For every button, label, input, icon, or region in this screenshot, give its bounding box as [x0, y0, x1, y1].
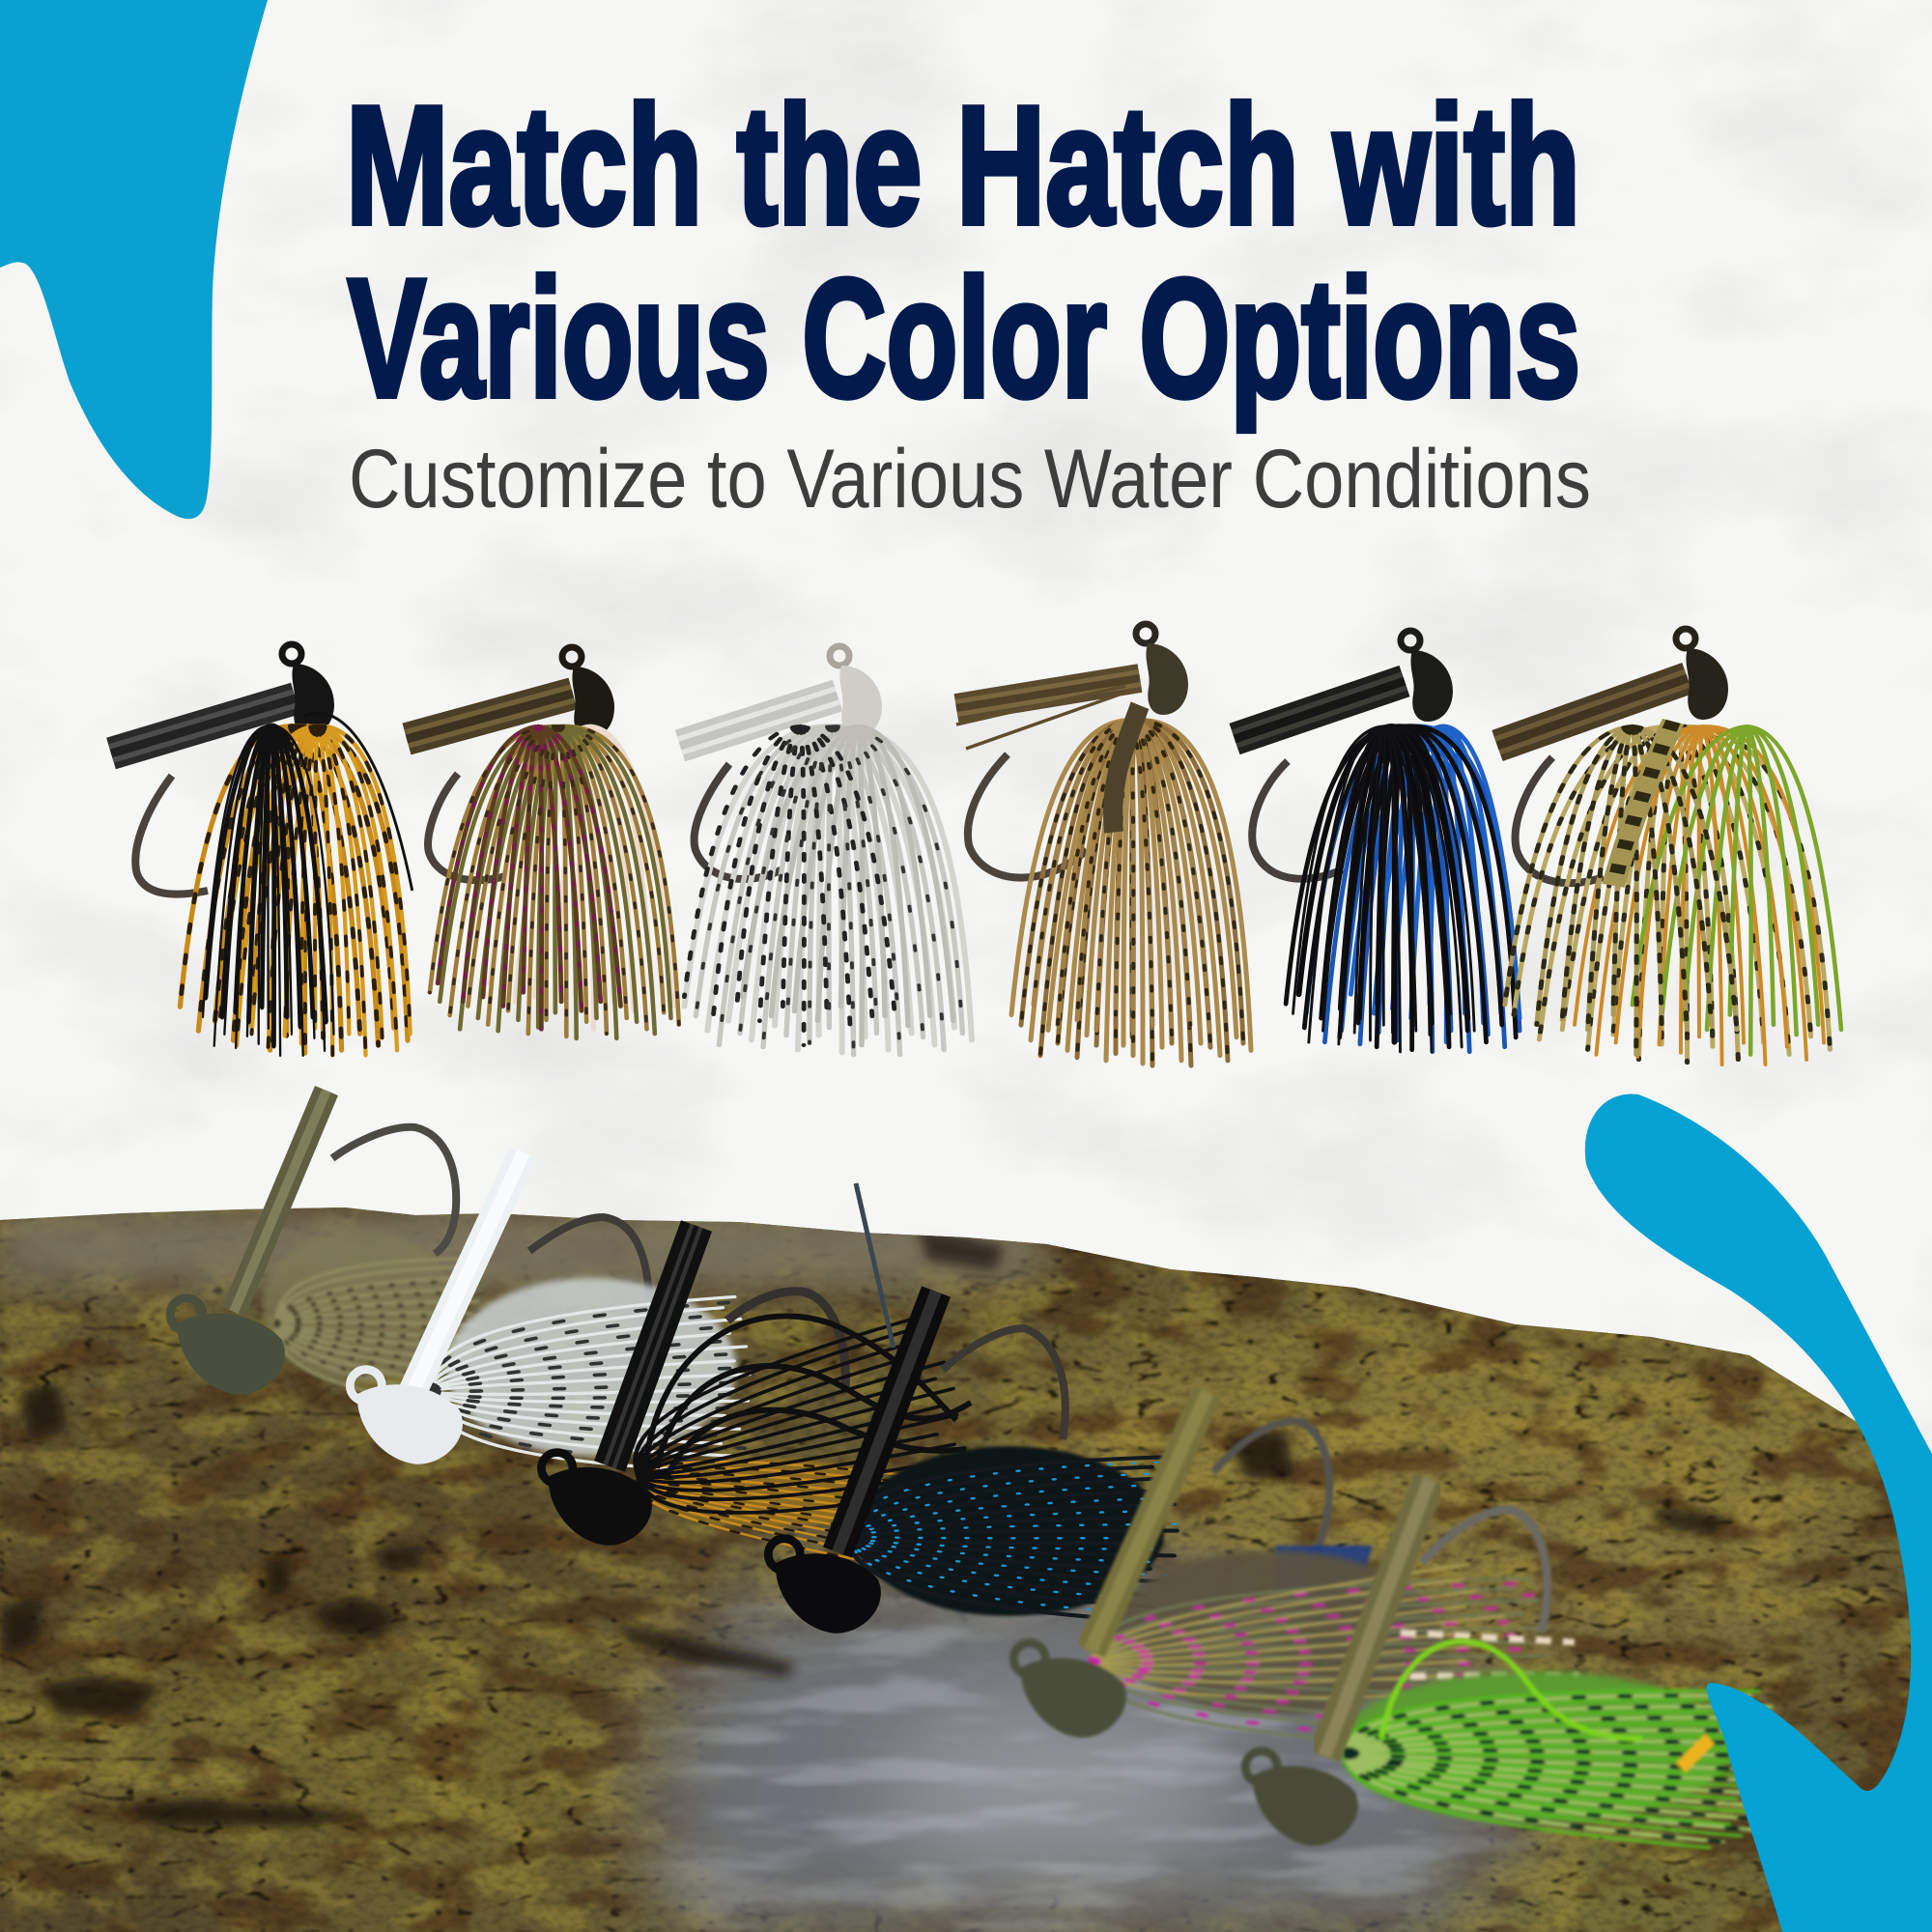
jig 5: black and blue	[1235, 631, 1520, 1052]
jig 3: white and black	[680, 646, 972, 1055]
photo jig 2: white	[350, 1152, 754, 1480]
title	[346, 71, 1580, 432]
jig 2: brown and purple	[407, 647, 679, 1038]
rock texture	[0, 1198, 1932, 1932]
rock colour patches	[0, 1323, 1913, 1932]
rock cracks	[0, 1227, 1729, 1828]
grey stone area	[638, 1565, 1526, 1932]
rock photo	[0, 1198, 1932, 1932]
blue corner shape: bottom right	[1585, 1094, 1932, 1932]
subtitle: Customize to Various Water Conditions	[349, 433, 1591, 526]
distant blurred rock edge	[0, 1208, 1063, 1294]
photo jig 5: pink and olive	[1013, 1392, 1579, 1750]
photo jig 4: black and blue	[768, 1183, 1179, 1634]
jig 1: black and orange	[111, 644, 412, 1055]
photo jig 6: green	[1245, 1479, 1776, 1850]
jig 6: olive, orange and green	[1497, 629, 1841, 1065]
photo jig 3: black and orange	[541, 1226, 976, 1574]
photo jig 1: olive	[170, 1091, 481, 1407]
blue corner shape: top left	[0, 0, 268, 519]
jig 4: tan and brown	[956, 624, 1251, 1065]
